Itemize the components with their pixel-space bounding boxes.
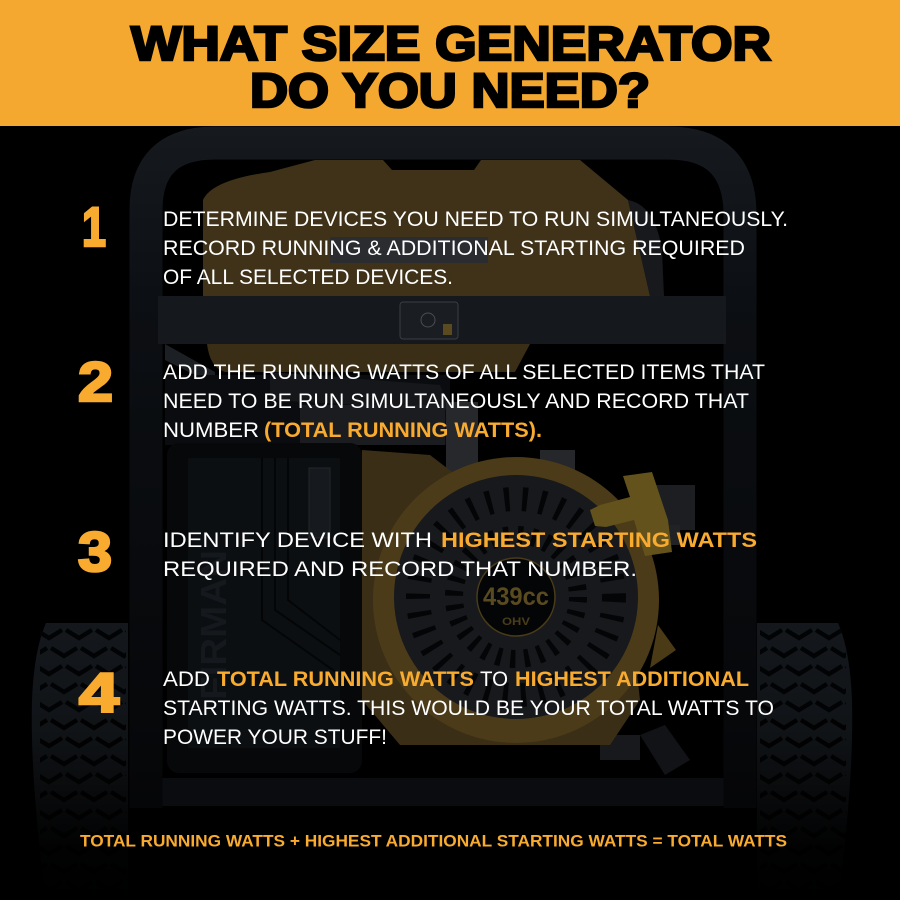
step 1 text: RECORD RUNNING & ADDITIONAL STARTING REQUIRED	[163, 236, 745, 260]
step 2 number: 2	[78, 350, 113, 413]
brand mark: FIRMAN	[193, 550, 234, 700]
tank side shadow	[628, 200, 664, 296]
choke label plate	[400, 302, 458, 339]
title: WHAT SIZE GENERATOR	[131, 18, 771, 71]
left tire	[30, 623, 130, 900]
engine housing	[362, 450, 640, 745]
title: DO YOU NEED?	[250, 65, 650, 118]
step 2 text: ADD THE RUNNING WATTS OF ALL SELECTED ITEMS THAT	[163, 360, 765, 384]
step 1 number: 1	[82, 195, 106, 258]
step 4 text: HIGHEST ADDITIONAL	[515, 667, 749, 691]
tubular frame	[146, 143, 740, 808]
step 3 number: 3	[78, 520, 112, 583]
step 3 text: REQUIRED AND RECORD THAT NUMBER.	[163, 557, 637, 581]
fuel tank	[203, 160, 650, 296]
step 1 text	[163, 207, 788, 289]
step 3 text: HIGHEST STARTING WATTS	[441, 528, 757, 552]
step 4 text: POWER YOUR STUFF!	[163, 725, 387, 749]
side tab	[650, 625, 676, 668]
starter pull handle	[590, 472, 672, 556]
step 4 text: ADD	[163, 667, 210, 691]
tank lower band	[207, 344, 530, 372]
step 1 text: OF ALL SELECTED DEVICES.	[163, 265, 453, 289]
crossbar	[158, 296, 726, 344]
439cc engine badge: 439cc	[483, 583, 549, 611]
lower frame rail	[160, 778, 725, 806]
title	[131, 18, 771, 118]
step 4 text: TOTAL RUNNING WATTS	[217, 667, 474, 691]
step 3 text: IDENTIFY DEVICE WITH	[163, 528, 432, 552]
step 4 text: TO	[480, 667, 508, 691]
439cc engine badge: OHV	[502, 616, 531, 628]
panel grooves	[262, 458, 340, 675]
439cc engine badge	[477, 558, 555, 636]
title banner	[0, 0, 900, 126]
step 3 text	[163, 528, 757, 581]
warning sticker	[309, 468, 330, 538]
step 4 text	[163, 667, 774, 749]
recoil starter ring	[373, 457, 659, 743]
step 2 text: (TOTAL RUNNING WATTS).	[264, 418, 542, 442]
control panel housing	[167, 443, 362, 773]
step 2 text: NEED TO BE RUN SIMULTANEOUSLY AND RECORD THAT	[163, 389, 749, 413]
step 4 number: 4	[79, 661, 119, 724]
step 2 text	[163, 360, 765, 442]
step 2 text: NUMBER	[163, 418, 259, 442]
fan slots outer	[418, 499, 614, 695]
right tire	[755, 623, 854, 900]
fuel gauge window	[330, 237, 488, 263]
fan slots inner	[454, 535, 578, 659]
formula footer: TOTAL RUNNING WATTS + HIGHEST ADDITIONAL STARTING WATTS = TOTAL WATTS	[80, 832, 787, 850]
mechanical parts behind the frame	[165, 344, 695, 775]
generator photo background	[30, 143, 854, 900]
step 4 text: STARTING WATTS. THIS WOULD BE YOUR TOTAL WATTS TO	[163, 696, 774, 720]
step 1 text: DETERMINE DEVICES YOU NEED TO RUN SIMULTANEOUSLY.	[163, 207, 788, 231]
starter fan cover	[394, 475, 638, 719]
